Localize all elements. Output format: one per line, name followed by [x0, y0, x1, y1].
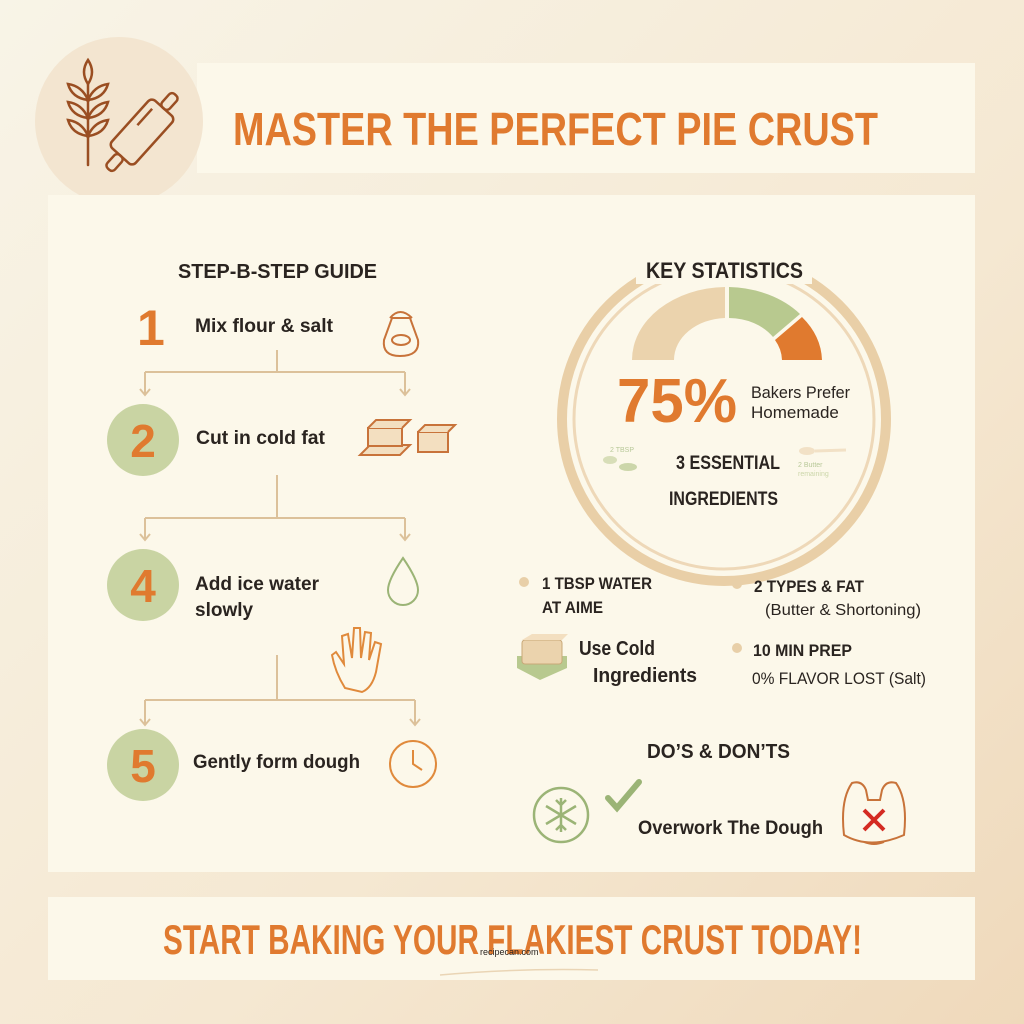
step 2: [107, 404, 326, 476]
bullet: prep: [732, 641, 926, 688]
step 1: [137, 300, 334, 356]
small decorative spoons: remaining: [798, 471, 829, 478]
stat: ingredients: 3 ESSENTIAL: [676, 453, 780, 474]
small decorative spoons: 2 TBSP: [610, 447, 634, 454]
bullet: water: AT AIME: [542, 598, 603, 617]
step 2: Cut in cold fat: [196, 428, 326, 449]
step 1: 1: [137, 300, 165, 356]
heading: key statistics: KEY STATISTICS: [646, 258, 803, 283]
bullet: cold ingredients: Ingredients: [593, 665, 697, 687]
panel: step guide: [107, 261, 455, 801]
step 4: 4: [130, 560, 156, 612]
stat: 75%: Homemade: [751, 403, 839, 422]
header icon circle: [35, 37, 203, 205]
icon: hand: [332, 628, 381, 692]
panel: dos and donts: Overwork The Dough: [638, 818, 823, 839]
step 4: slowly: [195, 600, 254, 621]
stat: 75%: Bakers Prefer: [751, 383, 850, 402]
icon: wheat: [68, 60, 108, 165]
icon: check: [608, 782, 639, 808]
stat: ingredients: INGREDIENTS: [669, 489, 778, 510]
bullet: prep: 0% FLAVOR LOST (Salt): [752, 669, 926, 688]
panel: dos and donts: [534, 741, 905, 844]
icon: rolling pin: [97, 84, 187, 180]
small decorative spoons: 2 Butter: [798, 462, 823, 469]
stat: 75%: 75%: [617, 367, 737, 436]
stat: ingredients: [669, 453, 780, 510]
step 5: Gently form dough: [193, 752, 360, 773]
step 5: [107, 729, 360, 801]
gauge chart: [632, 287, 822, 360]
bullet: cold ingredients: Use Cold: [579, 638, 655, 660]
step 4: [107, 549, 320, 621]
bullet: fat types: 2 TYPES & FAT: [754, 577, 865, 596]
panel: key statistics: [562, 250, 886, 581]
small decorative spoons: [603, 447, 846, 478]
icon: clock: [390, 741, 436, 787]
heading: step guide: STEP-B-STEP GUIDE: [178, 261, 377, 283]
step 4: Add ice water: [195, 574, 320, 595]
icon: flour bag: [384, 312, 418, 356]
header bar: [197, 63, 975, 173]
connectors: [140, 350, 420, 725]
bullet: water: [519, 574, 652, 617]
step 2: 2: [130, 415, 156, 467]
icon: muscle with x: [843, 782, 905, 844]
bullet: prep: 10 MIN PREP: [753, 641, 852, 660]
bullet: fat types: [732, 577, 921, 619]
bullet: cold ingredients: [579, 638, 697, 687]
ring: [562, 257, 886, 581]
bullet: water: 1 TBSP WATER: [542, 574, 652, 593]
icon: butter dish: [517, 634, 568, 680]
main panel: [48, 195, 975, 872]
stat: 75%: [617, 367, 850, 436]
step 5: 5: [130, 740, 156, 792]
watermark: recipecan.com: [480, 947, 539, 957]
step 1: Mix flour & salt: [195, 316, 334, 337]
icon: snowflake: [534, 788, 588, 842]
title: MASTER THE PERFECT PIE CRUST: [233, 103, 878, 155]
panel: dos and donts: DO’S & DON’TS: [647, 741, 790, 763]
icon: butter blocks: [360, 420, 455, 455]
bullet: fat types: (Butter & Shortoning): [765, 602, 921, 619]
icon: drop: [388, 558, 418, 605]
footer bar: [48, 897, 975, 980]
